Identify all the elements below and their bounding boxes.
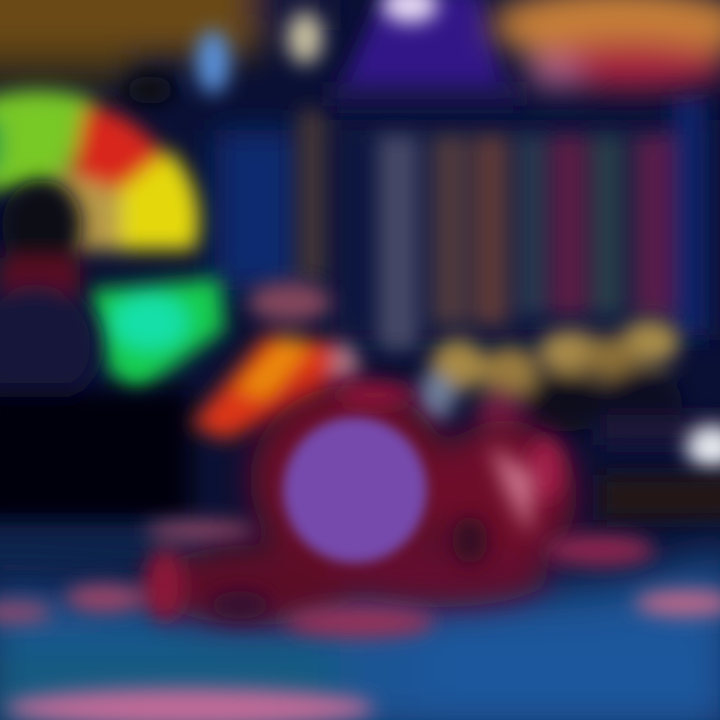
green glow panel — [90, 278, 225, 395]
top-right canopy — [490, 0, 720, 89]
ceiling lights — [126, 0, 438, 104]
chip dark mottling — [65, 383, 655, 638]
blue table felt — [0, 550, 720, 720]
dark person silhouette — [0, 180, 190, 520]
chip highlights — [490, 445, 535, 535]
navy wall panels — [198, 113, 636, 334]
right-hand gold chip stacks — [415, 320, 720, 445]
dark table edge — [0, 475, 720, 570]
purple tent roof — [330, 0, 520, 106]
white highlight at right — [686, 425, 720, 469]
pink chips on table — [0, 590, 720, 720]
crimson chip pile — [150, 385, 577, 625]
striped curtains — [298, 95, 706, 350]
purple chip centre — [283, 417, 427, 563]
orange-red chip stack — [190, 282, 359, 440]
top-left brown wall — [0, 0, 330, 85]
rainbow wheel — [0, 90, 199, 250]
